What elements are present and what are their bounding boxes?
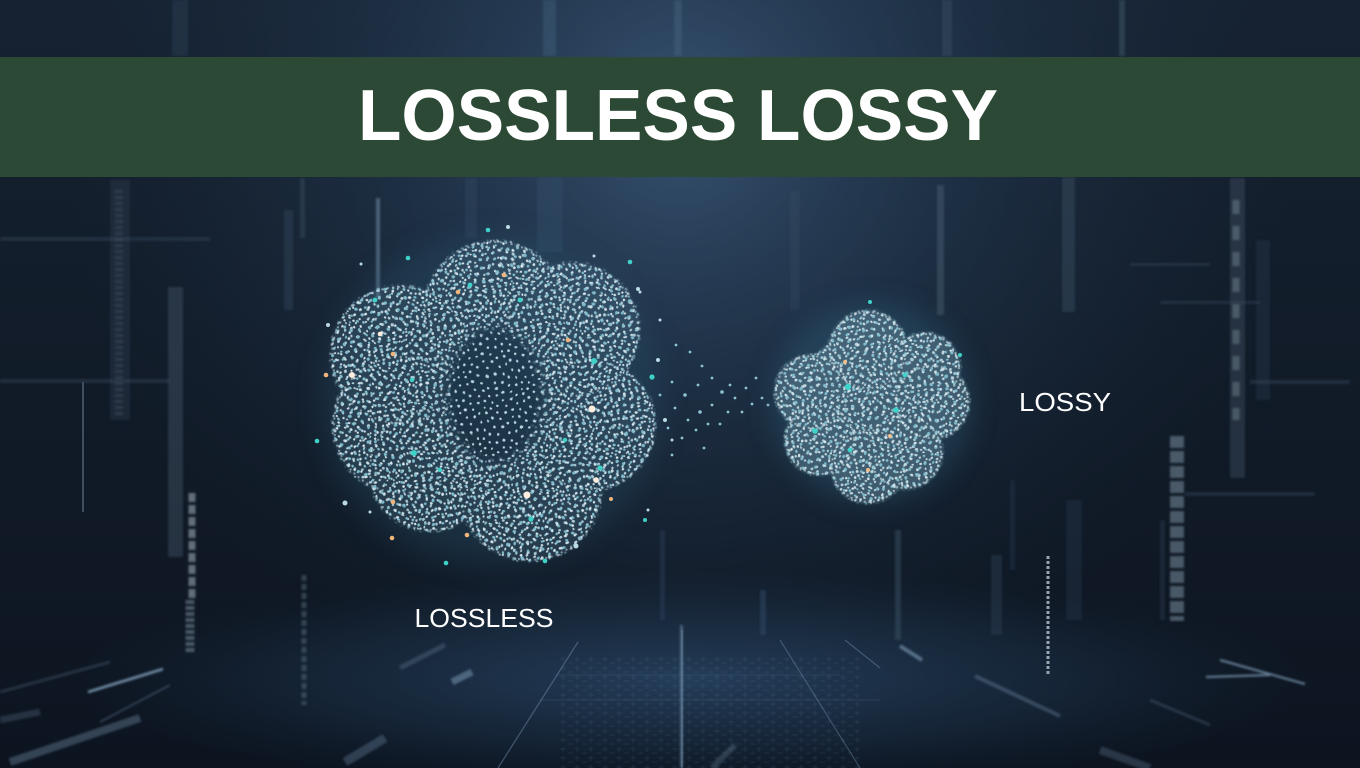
title: LOSSLESS LOSSY: [358, 76, 998, 156]
banner: [0, 57, 1360, 177]
label: lossless: LOSSLESS: [414, 603, 554, 633]
floor grid: [0, 630, 1305, 768]
particle bridge: [659, 344, 769, 456]
particle cloud: lossy: [767, 300, 978, 508]
stray particles: [326, 225, 674, 548]
bright sparkles: [349, 332, 599, 498]
particle cloud: lossless: [314, 225, 674, 566]
label: lossy: LOSSY: [1019, 387, 1111, 417]
